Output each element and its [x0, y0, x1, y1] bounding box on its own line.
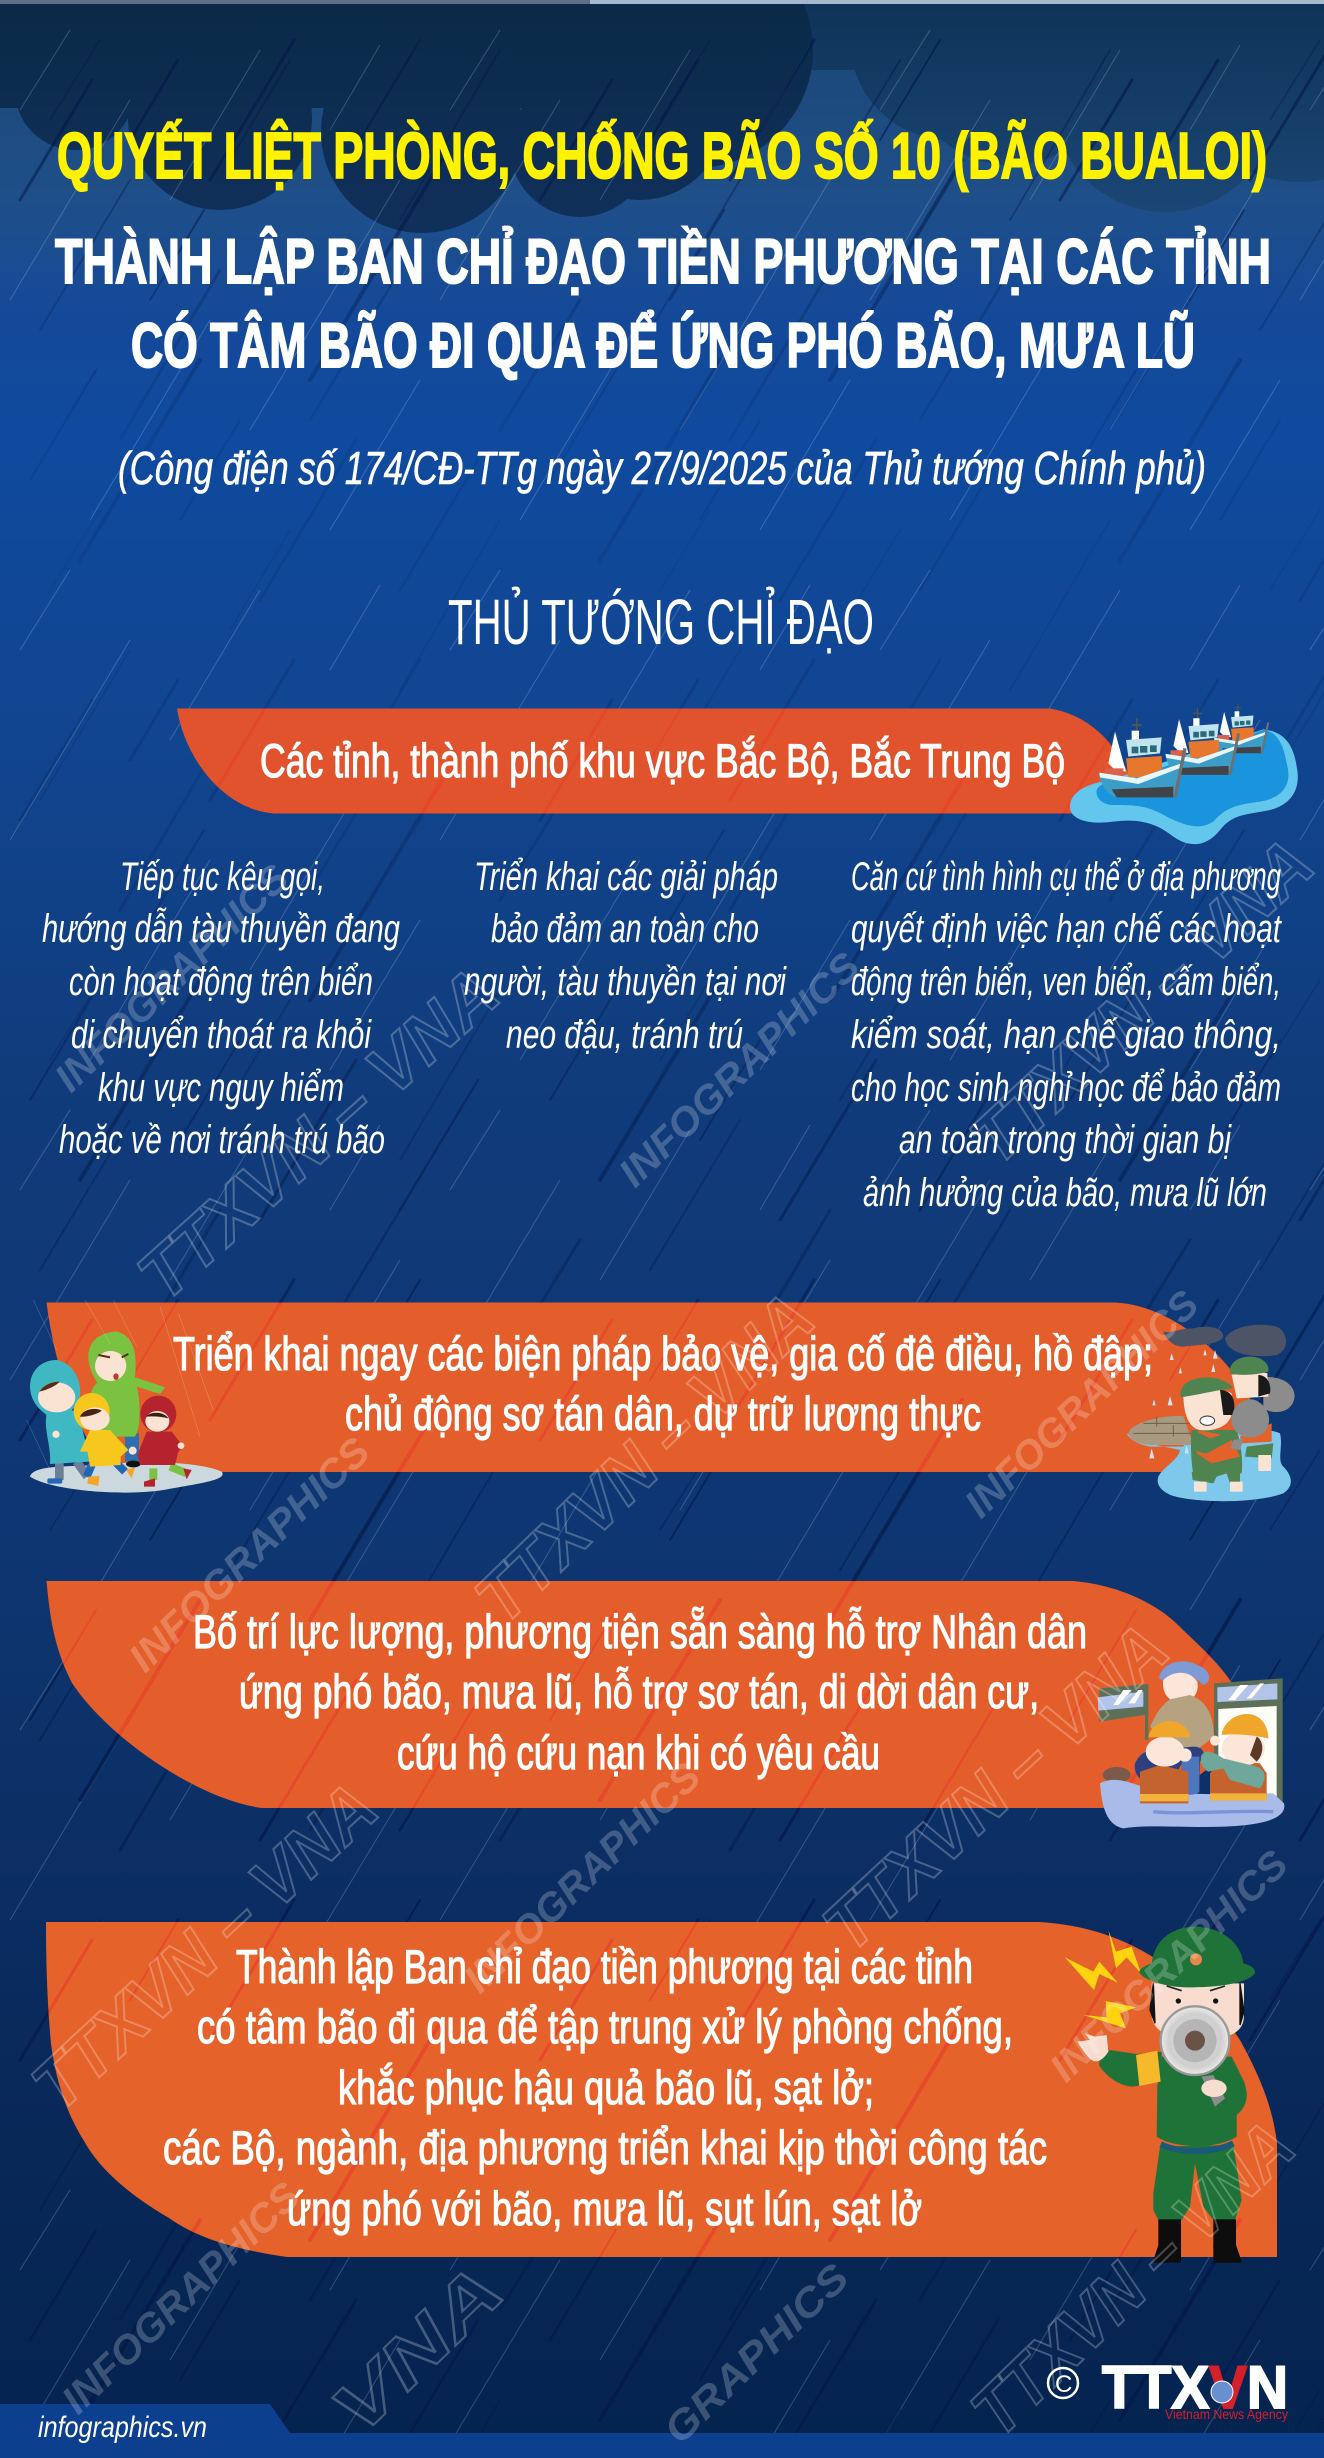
- banner text: chủ động sơ tán dân, dự trữ lương thực: [345, 1387, 981, 1440]
- banner text: các Bộ, ngành, địa phương triển khai kịp thời công tác: [163, 2121, 1047, 2174]
- banner text: ứng phó với bão, mưa lũ, sụt lún, sạt lở: [287, 2182, 922, 2235]
- panel: rescue forces banner: [46, 1581, 1245, 1808]
- text block: left column: [42, 855, 400, 1162]
- banner text: [173, 1327, 1153, 1440]
- text block: middle column: bảo đảm an toàn cho: [491, 907, 759, 951]
- banner text: có tâm bão đi qua để tập trung xử lý phòng chống,: [197, 2000, 1013, 2053]
- watermarks: INFOGRAPHICS: [957, 1282, 1208, 1526]
- text block: middle column: [464, 855, 787, 1057]
- watermarks: [17, 824, 1324, 2452]
- website tab: [0, 2404, 290, 2433]
- watermarks: INFOGRAPHICS: [611, 944, 869, 1195]
- watermarks: TTXVN – VNA: [808, 1609, 1183, 1966]
- text block: left column: còn hoạt động trên biển: [69, 960, 373, 1004]
- icon: soldiers with sandbags: [1127, 1325, 1295, 1501]
- text block: middle column: Triển khai các giải pháp: [474, 855, 778, 899]
- storm clouds: [0, 0, 1324, 233]
- icon: fishing boats on water: [1070, 704, 1298, 844]
- copyright logo: C: [1055, 2371, 1072, 2398]
- watermarks: VNA: [316, 2250, 518, 2449]
- text block: left column: hoặc về nơi tránh trú bão: [59, 1118, 385, 1162]
- panel: forward command banner: [46, 1922, 1277, 2257]
- watermarks: INFOGRAPHICS: [121, 1429, 379, 1680]
- watermarks: INFOGRAPHICS: [47, 856, 298, 1100]
- banner text: khắc phục hậu quả bão lũ, sạt lở;: [338, 2061, 874, 2114]
- TTXVN wordmark: TTXVN: [1102, 2354, 1288, 2421]
- banner text: Thành lập Ban chỉ đạo tiền phương tại các tỉnh: [236, 1940, 973, 1993]
- icon: rescuers carrying elderly woman: [1098, 1661, 1284, 1828]
- text block: right column: [851, 855, 1282, 1215]
- watermarks: INFOGRAPHICS: [456, 1754, 709, 2001]
- section heading: THỦ TƯỚNG CHỈ ĐẠO: [448, 585, 874, 658]
- watermarks: TTXVN – VNA: [123, 953, 513, 1315]
- copyright logo: Vietnam News Agency: [1165, 2406, 1288, 2422]
- text block: left column: di chuyển thoát ra khỏi: [71, 1013, 372, 1057]
- text block: left column: Tiếp tục kêu gọi,: [120, 855, 325, 899]
- banner text: ứng phó bão, mưa lũ, hỗ trợ sơ tán, di dời dân cư,: [239, 1665, 1039, 1718]
- banner text: [193, 1605, 1087, 1779]
- banner text: Các tỉnh, thành phố khu vực Bắc Bộ, Bắc Trung Bộ: [260, 734, 1065, 787]
- banner text: cứu hộ cứu nạn khi có yêu cầu: [397, 1726, 880, 1779]
- text block: left column: khu vực nguy hiểm: [98, 1066, 344, 1110]
- copyright logo: [1048, 2354, 1288, 2422]
- watermarks: INFOGRAPHICS: [1042, 1842, 1297, 2090]
- website address: infographics.vn: [38, 2411, 207, 2444]
- text block: left column: hướng dẫn tàu thuyền đang: [42, 906, 400, 951]
- text block: middle column: neo đậu, tránh trú: [506, 1013, 743, 1057]
- text block: middle column: người, tàu thuyền tại nơi: [464, 960, 787, 1004]
- banner text: [163, 1940, 1047, 2235]
- watermarks: GRAPHICS: [656, 2255, 858, 2452]
- icon: soldier with megaphone: [1065, 1927, 1255, 2263]
- watermarks: TTXVN – VNA: [460, 1278, 829, 1638]
- icon: family in raincoats: [27, 1300, 223, 1493]
- watermarks: TTXVN – VNA: [17, 1768, 392, 2125]
- bottom stripe: [0, 2433, 1324, 2458]
- headline: [55, 226, 1271, 381]
- watermarks: INFOGRAPHICS: [54, 2174, 309, 2422]
- panel: northern provinces banner: [177, 708, 1135, 814]
- panel: dyke protection banner: [46, 1302, 1277, 1472]
